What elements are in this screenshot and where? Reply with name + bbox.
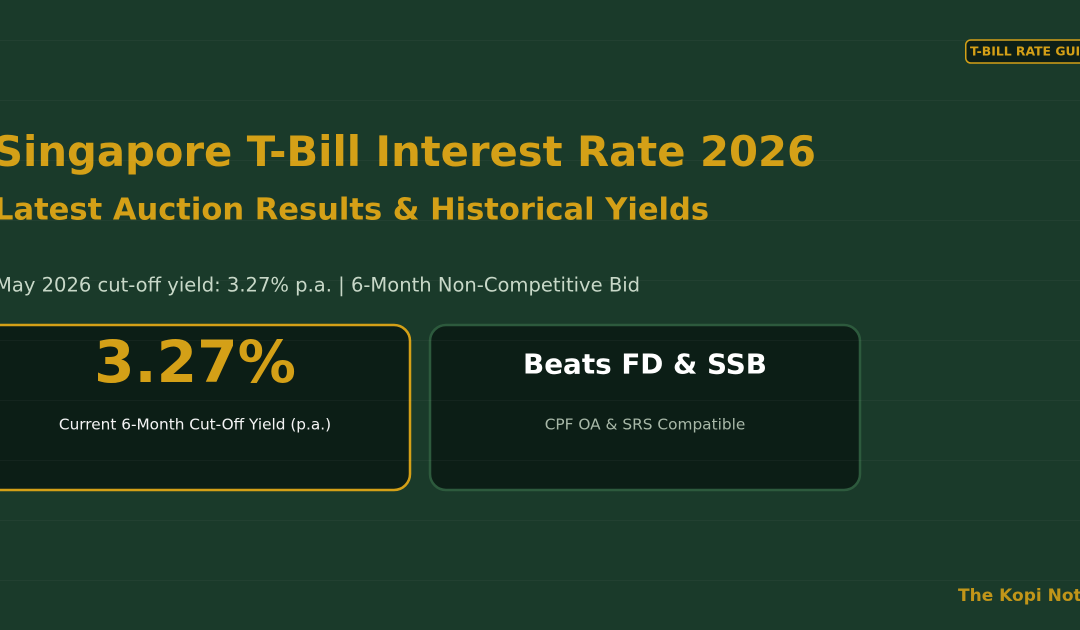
panel: current yield — [0, 325, 410, 490]
yield value: 3.27% — [94, 328, 296, 396]
comparison note: CPF OA & SRS Compatible — [545, 416, 745, 434]
panel: comparison — [430, 325, 860, 490]
yield label: Current 6-Month Cut-Off Yield (p.a.) — [59, 416, 331, 434]
comparison heading: Beats FD & SSB — [523, 348, 767, 380]
title: Singapore T-Bill Interest Rate 2026 — [0, 127, 816, 176]
subtitle: Latest Auction Results & Historical Yields — [0, 192, 709, 228]
yield summary line: May 2026 cut-off yield: 3.27% p.a. | 6-Month Non-Competitive Bid — [0, 274, 640, 296]
badge: T-Bill Rate Guide — [966, 40, 1080, 63]
